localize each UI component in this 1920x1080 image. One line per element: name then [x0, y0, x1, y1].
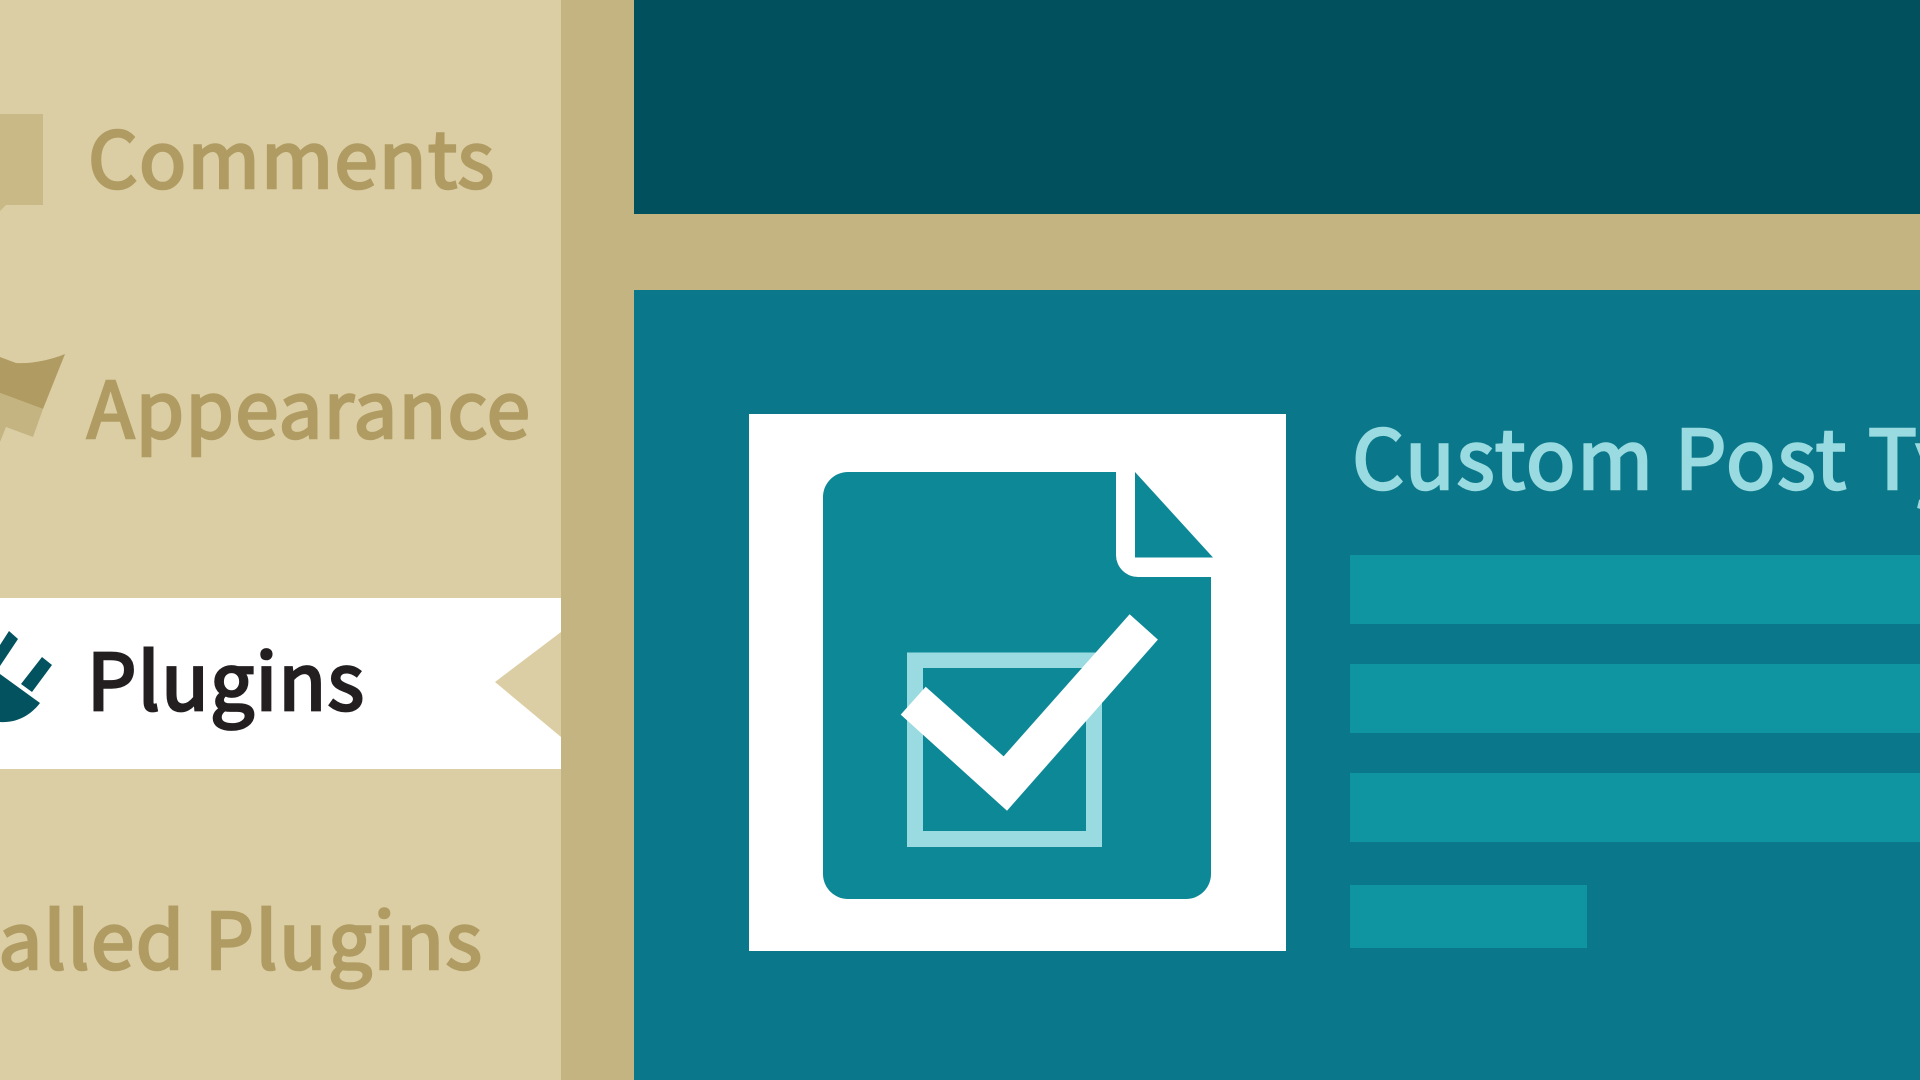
icon: plug: [0, 631, 52, 722]
document shape: [823, 472, 1211, 899]
folded corner: [1135, 472, 1213, 558]
checkmark: [901, 614, 1158, 811]
panel: plugin card: [634, 290, 1920, 1080]
checkbox outline: [907, 652, 1102, 847]
menu label: Comments: Comments: [88, 99, 494, 211]
active menu item: Plugins: [0, 598, 561, 769]
icon: comment bubble: [0, 114, 43, 211]
panel: top dark header: [634, 0, 1920, 214]
icon: appearance brush: [0, 354, 65, 442]
menu label: Appearance: Appearance: [87, 349, 530, 461]
panel: sidebar menu: [0, 0, 561, 1080]
icon tile: document with checkbox: [749, 414, 1286, 951]
menu label: Plugins: Plugins: [87, 621, 364, 733]
placeholder text bars: [1350, 555, 1920, 948]
